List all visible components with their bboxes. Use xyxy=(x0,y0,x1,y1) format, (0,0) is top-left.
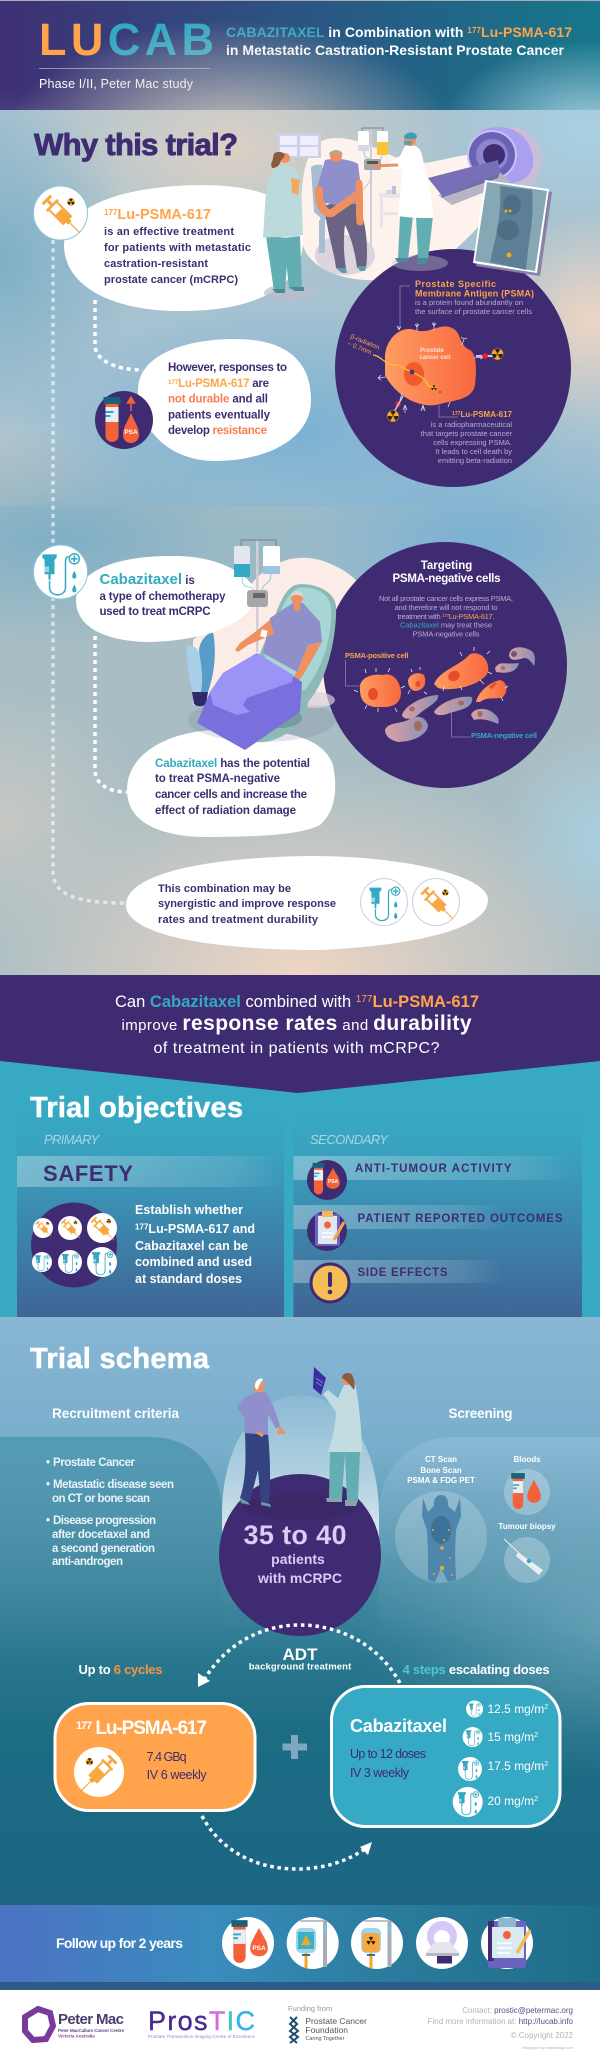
safety text: combined and used xyxy=(135,1255,252,1269)
targeting title xyxy=(392,560,500,585)
patient number circle: with mCRPC xyxy=(257,1570,342,1586)
psma label: Prostate Specific xyxy=(415,279,497,289)
question banner: Can Cabazitaxel combined with xyxy=(115,993,351,1011)
speech bubble: radiation damage: cancer cells and increase the xyxy=(155,789,307,801)
band: follow up: Follow up for 2 years xyxy=(56,1935,183,1951)
band: follow up xyxy=(0,1905,600,1990)
recruitment criteria: on CT or bone scan xyxy=(52,1493,150,1505)
logo: Peter Mac: Peter MacCallum Cancer Centre xyxy=(58,2028,124,2033)
speech bubble: Lu-PSMA: Lu-PSMA-617 xyxy=(117,207,211,223)
dose steps xyxy=(453,1700,548,1817)
panel: secondary objectives: SECONDARY xyxy=(310,1132,389,1147)
psma positive cells: PSMA-positive cell xyxy=(345,651,408,660)
safety text xyxy=(135,1203,255,1286)
speech bubble: resistance: are xyxy=(252,378,269,390)
speech bubble: synergistic: synergistic and improve response xyxy=(158,898,336,910)
box: Lu-PSMA-617: Lu-PSMA-617 xyxy=(91,1718,207,1739)
arrow: cycle top xyxy=(198,1625,401,1687)
panel: secondary objectives xyxy=(294,1098,582,1317)
speech bubble: Lu-PSMA: prostate cancer (mCRPC) xyxy=(104,274,238,286)
logo LUCAB: LUCAB xyxy=(39,14,214,65)
label: cycles: Up to 6 cycles xyxy=(78,1662,162,1677)
prostate cancer cell: cancer cell xyxy=(419,355,451,361)
safety text: Cabazitaxel can be xyxy=(135,1239,248,1253)
clinic cream backdrop xyxy=(301,138,510,280)
psma label xyxy=(400,279,534,325)
figure: older man xyxy=(237,1378,284,1507)
dose steps: 20 mg/m xyxy=(488,1794,534,1808)
heading: trial objectives: Trial objectives xyxy=(30,1092,243,1124)
safety icon circle xyxy=(31,1202,118,1288)
cabinet xyxy=(277,133,321,158)
lutetium label: emitting beta-radiation xyxy=(438,456,512,465)
section: teal objectives background xyxy=(0,1055,600,1317)
circle panel: PSMA details xyxy=(346,180,552,465)
box: Lu-PSMA-617: IV 6 weekly xyxy=(147,1768,207,1782)
lutetium label: cells expressing PSMA. xyxy=(433,438,512,447)
iv stand xyxy=(358,128,388,246)
funding: Caring Together xyxy=(305,2036,345,2042)
patient shirt xyxy=(263,603,322,672)
speech bubble: cabazitaxel: a type of chemotherapy xyxy=(100,591,226,603)
ADT label: background treatment xyxy=(249,1662,352,1672)
objective: side effects xyxy=(294,1260,504,1302)
recruitment criteria: Disease progression xyxy=(53,1515,156,1527)
question banner: Lu-PSMA-617 xyxy=(372,993,479,1011)
speech bubble: radiation damage: effect of radiation damage xyxy=(155,805,296,817)
side table xyxy=(379,186,405,228)
targeting body: PSMA-negative cells xyxy=(412,630,480,638)
speech bubble: synergistic: rates and treatment durability xyxy=(158,914,319,926)
iv drip stand xyxy=(234,540,280,652)
logo: Peter Mac: Peter Mac xyxy=(58,2011,124,2028)
objective: anti-tumour activity: PSA xyxy=(328,1179,339,1185)
psma negative cells: PSMA-negative cell xyxy=(471,731,537,740)
funding: Foundation xyxy=(305,2025,348,2035)
speech bubble: resistance: However, responses to xyxy=(168,362,287,374)
lutetium label: that targets prostate cancer xyxy=(421,429,512,438)
recruitment criteria: • xyxy=(46,1515,50,1527)
lutetium label: is a radiopharmaceutical xyxy=(431,420,512,429)
recruitment criteria: anti-androgen xyxy=(52,1556,123,1568)
safety text: 177 xyxy=(135,1222,149,1232)
icon: blue infusion xyxy=(287,1917,339,1969)
section: why this trial xyxy=(0,20,600,596)
safety text: Establish whether xyxy=(135,1203,243,1217)
icon: syringe small xyxy=(412,878,460,926)
psma negative cells xyxy=(385,647,537,742)
lutetium label: 177 xyxy=(452,411,461,417)
patient arms and head xyxy=(235,591,322,682)
chemotherapy patient illustration xyxy=(187,540,336,750)
speech bubble: cabazitaxel: Cabazitaxel is xyxy=(100,571,195,588)
header band xyxy=(0,0,600,110)
screening panel: CT Scan xyxy=(425,1455,457,1464)
title: CABAZITAXEL in Combination with xyxy=(226,24,463,40)
patient number circle: patients xyxy=(271,1551,325,1567)
funding: Prostate Cancer xyxy=(305,2016,367,2026)
prostate cancer cell: Prostate xyxy=(420,348,445,354)
dose steps: 2 xyxy=(544,1761,548,1768)
speech bubble: resistance: 177 xyxy=(168,379,179,386)
screening panel: Screening xyxy=(448,1406,512,1421)
title: 177 xyxy=(467,26,481,35)
contact xyxy=(428,2006,574,2050)
box: Lu-PSMA-617 xyxy=(55,1704,255,1810)
objective: anti-tumour activity: ANTI-TUMOUR ACTIVITY xyxy=(355,1163,512,1175)
ADT label xyxy=(249,1645,352,1672)
speech bubble: resistance: not durable and all xyxy=(168,394,268,406)
icon: syringe xyxy=(34,186,88,240)
funding: Funding from xyxy=(288,2004,332,2013)
box: cabazitaxel xyxy=(332,1686,560,1826)
contact: Find more information at: http://lucab.info xyxy=(428,2017,574,2026)
speech bubble: cabazitaxel: used to treat mCRPC xyxy=(100,606,210,618)
patient number circle xyxy=(219,1474,381,1636)
dose steps: 2 xyxy=(544,1704,548,1711)
icon: orange infusion xyxy=(351,1917,403,1969)
recruitment criteria: • xyxy=(46,1479,50,1491)
dotted connector B xyxy=(95,636,127,792)
blanket xyxy=(197,653,302,750)
panel: screening backdrop xyxy=(379,1437,600,1640)
biopsy icon xyxy=(504,1537,550,1583)
speech bubble: Lu-PSMA: for patients with metastatic xyxy=(104,242,251,254)
lutetium label: Lu-PSMA-617 xyxy=(460,410,513,419)
recruitment criteria: Metastatic disease seen xyxy=(53,1479,174,1491)
speech bubble: cabazitaxel xyxy=(76,556,257,642)
icon: chemotherapy drip xyxy=(34,545,88,599)
section: trial schema background xyxy=(0,1317,600,1990)
prostate cancer cell: β-radiation xyxy=(349,333,381,352)
logo: Peter Mac xyxy=(25,2009,124,2040)
panel: primary objective xyxy=(17,1098,284,1317)
psma positive cells xyxy=(345,647,508,712)
dose steps: 15 mg/m xyxy=(488,1730,534,1744)
targeting body: 177 xyxy=(442,613,449,618)
safety heading: SAFETY xyxy=(43,1161,133,1186)
speech bubble: Lu-PSMA: is an effective treatment xyxy=(104,226,234,238)
psma label: Membrane Antigen (PSMA) xyxy=(415,288,534,298)
icon: PSA up: PSA xyxy=(124,429,138,436)
screening panel: Tumour biopsy xyxy=(498,1522,556,1531)
recruitment criteria xyxy=(46,1406,179,1568)
lutetium label xyxy=(421,405,513,465)
question banner: 177 xyxy=(356,994,373,1005)
targeting body: Cabazitaxel may treat these xyxy=(400,620,492,630)
circle backdrop: PSMA xyxy=(335,249,571,487)
targeting body xyxy=(379,594,513,638)
scanner xyxy=(428,127,542,205)
footer xyxy=(0,1990,600,2060)
psma label: the surface of prostate cancer cells xyxy=(415,307,532,316)
arrow: cycle bottom xyxy=(202,1816,372,1869)
icon: drip small xyxy=(360,878,408,926)
bloods icon xyxy=(504,1469,550,1515)
speech bubble: resistance: develop resistance xyxy=(168,425,267,437)
circle panel: targeting PSMA-negative xyxy=(323,542,567,788)
speech bubble: resistance xyxy=(138,339,311,461)
recruitment criteria: • xyxy=(46,1457,50,1469)
title: Lu-PSMA-617 xyxy=(481,24,572,40)
x-ray image xyxy=(473,180,552,276)
targeting title: PSMA-negative cells xyxy=(392,573,500,585)
title xyxy=(226,24,572,58)
objective: patient reported outcomes: PATIENT REPORTED OUTCOMES xyxy=(358,1213,563,1225)
label: escalating: 4 steps escalating doses xyxy=(403,1662,550,1677)
box: cabazitaxel: Cabazitaxel xyxy=(350,1716,447,1736)
contact: Contact: prostic@petermac.org xyxy=(462,2006,573,2015)
plus sign xyxy=(282,1735,307,1759)
study phase: Phase I/II, Peter Mac study xyxy=(39,77,194,91)
recruitment criteria: a second generation xyxy=(52,1543,155,1555)
box: Lu-PSMA-617: 7.4 GBq xyxy=(147,1750,187,1764)
screening panel: Bone Scan xyxy=(420,1466,462,1475)
recruitment criteria: after docetaxel and xyxy=(52,1529,150,1541)
dotted connector A xyxy=(95,300,143,370)
speech bubble: Lu-PSMA: 177 xyxy=(104,208,118,217)
screening panel: Bloods xyxy=(513,1455,541,1464)
targeting body: and therefore will not respond to xyxy=(394,603,498,612)
recruitment criteria: Recruitment criteria xyxy=(52,1406,179,1421)
logo: ProsTIC: ProsTIC xyxy=(148,2006,255,2036)
recliner chair xyxy=(245,584,336,742)
heading: why this trial: Why this trial? xyxy=(34,127,238,162)
speech bubble: Lu-PSMA: castration-resistant xyxy=(104,258,208,270)
dose steps: 2 xyxy=(534,1732,538,1739)
targeting body: Lu-PSMA-617. xyxy=(449,612,494,621)
arch glow xyxy=(222,1395,379,1560)
ADT label: ADT xyxy=(283,1645,318,1664)
chemotherapy cream backdrop xyxy=(193,558,370,710)
panel: recruitment backdrop xyxy=(0,1437,222,1640)
objective: anti-tumour activity xyxy=(294,1156,574,1200)
safety text: at standard doses xyxy=(135,1272,242,1286)
dose steps: 2 xyxy=(534,1796,538,1803)
icon: scanner xyxy=(416,1917,468,1969)
plant xyxy=(187,633,215,706)
icon: PSA: PSA xyxy=(252,1945,266,1952)
dose steps: 17.5 mg/m xyxy=(488,1759,544,1773)
speech bubble: resistance: Lu-PSMA-617 xyxy=(178,378,250,390)
prostate cancer cell: ~ 0.7mm xyxy=(346,340,372,356)
psma label: is a protein found abundantly on xyxy=(415,298,523,307)
screening panel xyxy=(395,1406,556,1583)
lutetium label: It leads to cell death by xyxy=(435,447,512,456)
objective: side effects: SIDE EFFECTS xyxy=(358,1267,448,1279)
screening panel: PSMA & FDG PET xyxy=(407,1476,475,1485)
patient seated xyxy=(311,150,375,275)
safety text: Lu-PSMA-617 and xyxy=(148,1222,255,1236)
scan body xyxy=(395,1491,487,1583)
question banner: of treatment in patients with mCRPC? xyxy=(154,1040,440,1057)
question banner: improve response rates and durability xyxy=(122,1012,472,1035)
speech bubble: synergistic xyxy=(126,856,488,950)
clinic illustration xyxy=(277,127,542,275)
speech bubble: radiation damage xyxy=(127,730,335,837)
contact: Infographic by creatodesign.com xyxy=(522,2046,573,2050)
heading: trial schema: Trial schema xyxy=(30,1343,210,1375)
doctor xyxy=(372,132,448,271)
contact: © Copyright 2022 xyxy=(511,2031,574,2040)
speech bubble: Lu-PSMA xyxy=(64,185,303,311)
logo: Peter Mac: Victoria Australia xyxy=(58,2034,95,2038)
targeting body: treatment with xyxy=(398,612,441,621)
prostate cancer cell xyxy=(346,322,503,422)
box: Lu-PSMA-617: 177 xyxy=(76,1720,92,1732)
box: cabazitaxel: Up to 12 doses xyxy=(350,1747,426,1761)
icon: clipboard xyxy=(481,1917,533,1969)
dose steps: 12.5 mg/m xyxy=(488,1702,544,1716)
question banner xyxy=(0,975,600,1093)
panel: primary objective: PRIMARY xyxy=(44,1132,100,1147)
icon: PSA up xyxy=(95,391,153,449)
speech bubble: radiation damage: Cabazitaxel has the potential xyxy=(155,758,310,770)
box: cabazitaxel: IV 3 weekly xyxy=(350,1766,410,1780)
speech bubble: resistance: patients eventually xyxy=(168,410,271,422)
funding xyxy=(288,2004,367,2043)
speech bubble: radiation damage: to treat PSMA-negative xyxy=(155,773,280,785)
figure: doctor with scan xyxy=(313,1367,362,1506)
title: in Metastatic Castration-Resistant Prostate Cancer xyxy=(226,42,565,58)
targeting title: Targeting xyxy=(421,560,472,572)
dotted connector long xyxy=(53,240,126,903)
objective: patient reported outcomes xyxy=(294,1205,563,1251)
patient number circle: 35 to 40 xyxy=(244,1520,346,1550)
speech bubble: synergistic: This combination may be xyxy=(158,883,291,895)
section: cabazitaxel background xyxy=(0,420,600,1185)
targeting body: Not all prostate cancer cells express PSMA, xyxy=(379,594,513,603)
logo: ProsTIC: Prostate Theranostics Imaging Centre of Excellence xyxy=(148,2034,256,2039)
recruitment criteria: Prostate Cancer xyxy=(53,1457,136,1469)
icon: PSA xyxy=(222,1917,274,1969)
nurse left xyxy=(263,152,318,302)
